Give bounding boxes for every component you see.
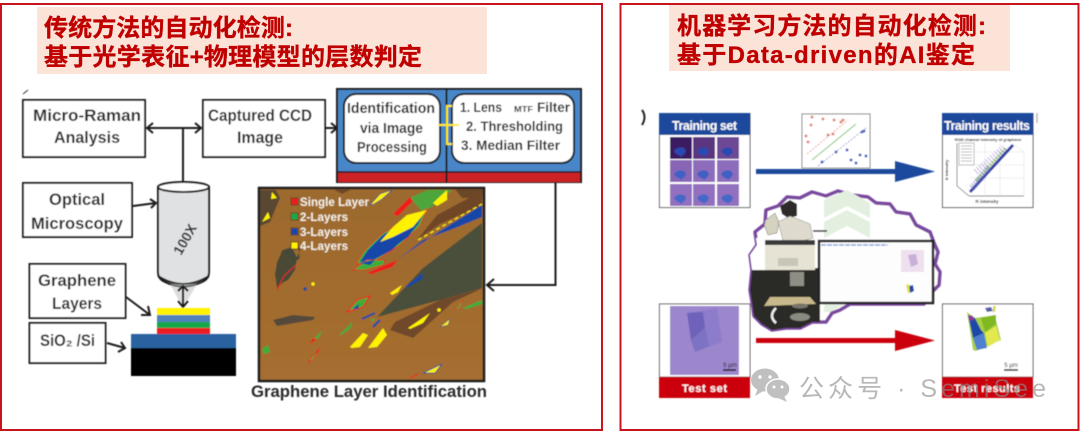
icon: objective lens (158, 182, 209, 308)
legend: layer colours (291, 197, 370, 253)
legend: layer colours: Single Layer (300, 197, 370, 209)
cloud: AI microscope system (748, 190, 940, 334)
panel: training set: Training set (672, 119, 738, 133)
chart: SVM scatter plot (802, 114, 870, 168)
box: Captured CCD Image: Captured CCD (208, 106, 312, 125)
panel: machine learning method (620, 4, 1078, 430)
panel: image processing: 1. Lens (460, 99, 502, 115)
panel: training results: RGB channel intensity of graphene (955, 137, 1022, 142)
title: traditional method: 基于光学表征+物理模型的层数判定 (44, 44, 422, 71)
arrow: CCD to processing (325, 123, 337, 133)
panel: training results (942, 113, 1033, 208)
sample layer stack (131, 308, 236, 376)
caption: Graphene Layer Identification: Graphene Layer Identification (251, 382, 487, 401)
background chevrons (824, 190, 870, 312)
title: machine learning method: 基于Data-driven的AI鉴定 (677, 42, 975, 69)
panel: training set (659, 113, 750, 208)
workflow: machine learning detection (642, 110, 1037, 398)
box: Graphene Layers (30, 264, 126, 318)
title: traditional method (37, 7, 487, 74)
legend: layer colours: 4-Layers (300, 241, 348, 253)
box: Optical Microscopy: Optical (49, 190, 105, 209)
panel: test set: Test set (682, 383, 727, 395)
panel: training results: B intensity (944, 159, 949, 180)
box: Graphene Layers: Layers (52, 294, 102, 313)
title: machine learning method (669, 5, 1010, 71)
panel: traditional method (1, 4, 602, 430)
panel: image processing: via Image (360, 120, 423, 137)
panel: test results (942, 304, 1033, 398)
arrow: blue training flow (756, 161, 935, 182)
legend: layer colours: 2-Layers (300, 212, 348, 224)
box: Optical Microscopy (23, 183, 132, 237)
small tick mark (23, 90, 28, 94)
icon: WeChat (751, 368, 790, 402)
arrow: SiO2 to stack (107, 342, 125, 352)
arrow: Raman to CCD (147, 123, 201, 182)
box: Graphene Layers: Graphene (38, 271, 116, 290)
box: Micro-Raman Analysis: Analysis (54, 128, 120, 147)
microscope (748, 200, 827, 334)
box: Captured CCD Image: Image (237, 128, 283, 147)
panel: image processing: Processing (357, 139, 427, 156)
panel: image processing: Identification (347, 100, 435, 117)
title: machine learning method: 机器学习方法的自动化检测: (677, 12, 986, 40)
panel: training results: R intensity (975, 199, 999, 204)
box: Micro-Raman Analysis: Micro-Raman (33, 106, 141, 125)
flowchart: traditional detection (23, 89, 581, 401)
panel: image processing: Filter (537, 99, 571, 115)
box: SiO2/Si: SiO₂ /Si (40, 331, 95, 350)
arrow: graphene to stack (126, 297, 150, 315)
arrow: processing to result image (487, 182, 556, 291)
panel: test set (659, 304, 750, 398)
title: traditional method: 传统方法的自动化检测: (44, 14, 293, 42)
monitor (819, 241, 933, 303)
panel: image processing: 3. Median Filter (461, 137, 561, 153)
panel: image processing (337, 89, 581, 182)
box: SiO2/Si (30, 323, 106, 363)
arrow: red test flow (756, 330, 935, 351)
box: Captured CCD Image (203, 100, 325, 157)
panel: test results: Test results (954, 383, 1020, 395)
panel: training results: Training results (944, 119, 1030, 133)
arrow: microscopy to objective (133, 199, 156, 208)
panel: test results: 5 μm (1004, 363, 1018, 369)
panel: image processing: 2. Thresholding (466, 118, 563, 134)
panel: image processing: MTF (514, 105, 533, 114)
small mark at panel edge (642, 110, 644, 125)
image: graphene layer map (259, 188, 484, 381)
panel: test set: 5 μm (723, 363, 737, 369)
watermark text: 公众号 · SemiSee (799, 375, 1046, 403)
box: Micro-Raman Analysis (23, 100, 145, 157)
box: Optical Microscopy: Microscopy (31, 214, 124, 233)
watermark: WeChat public account (751, 368, 1046, 403)
legend: layer colours: 3-Layers (300, 227, 348, 239)
icon: objective lens: 100X (170, 221, 200, 258)
